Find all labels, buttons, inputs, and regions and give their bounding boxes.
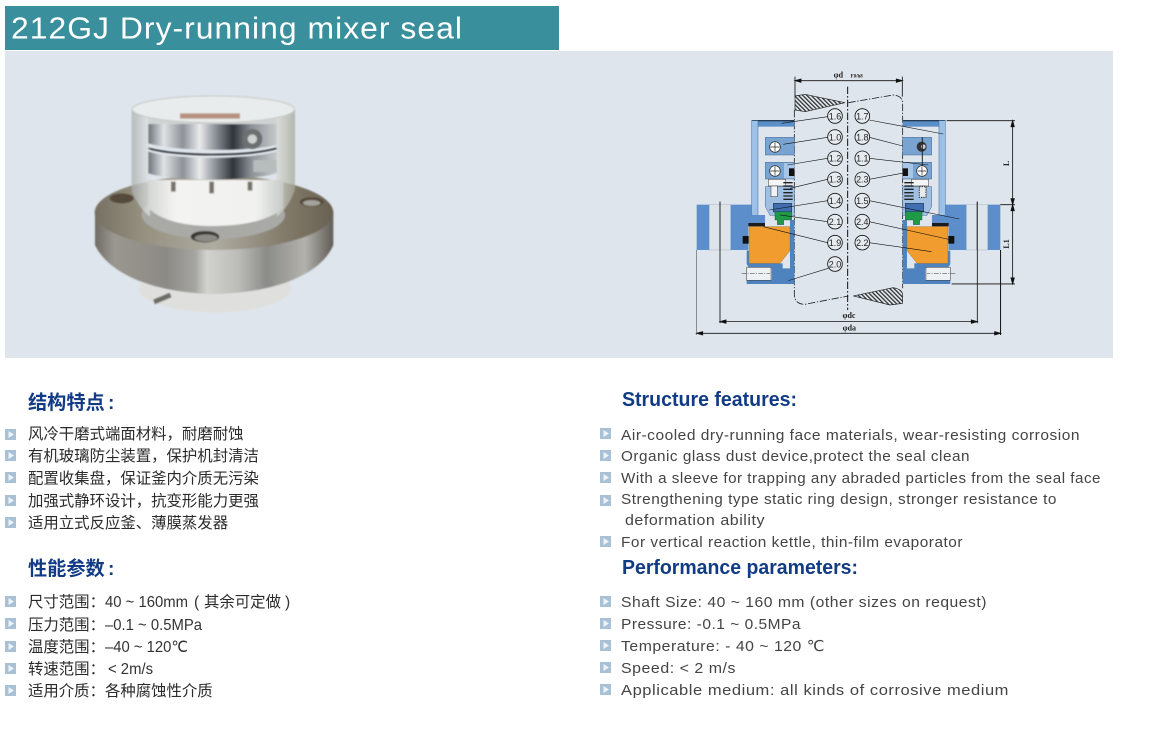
left adjusting screws <box>770 142 780 176</box>
part number balloons, left column <box>828 109 842 271</box>
list: Performance parameters: Speed: < 2 m/s <box>621 660 736 677</box>
list: Chinese structure features: 适用立式反应釜、薄膜蒸发器 <box>28 513 228 532</box>
right half of seal section <box>903 120 1000 335</box>
list: Performance parameters: Shaft Size: 40 ~ 160 mm (other sizes on request) <box>621 594 987 611</box>
list: Structure features: For vertical reaction kettle, thin-film evaporator <box>621 534 963 551</box>
list: Performance parameters: Temperature: - 40 ~ 120 ℃ <box>621 638 825 655</box>
dimension lines <box>697 77 1015 335</box>
list: Chinese performance parameters: 其余可定做 <box>204 592 281 611</box>
part number balloons, left column: 2.1 <box>829 217 841 227</box>
heading: Performance parameters: Performance parameters: <box>622 557 858 579</box>
list: Chinese performance parameters: ) <box>285 594 290 611</box>
title text: 212GJ Dry-running mixer seal <box>11 10 463 46</box>
list: Chinese structure features: 风冷干磨式端面材料，耐磨耐蚀 <box>28 425 243 443</box>
list: Chinese performance parameters: 转速范围： <box>28 660 105 678</box>
list: Chinese structure features: 配置收集盘，保证釜内介质无污染 <box>28 468 259 488</box>
part number balloons, left column: 1.0 <box>829 132 841 142</box>
part number balloons, right column: 2.3 <box>856 175 869 185</box>
list: Chinese structure features: 加强式静环设计，抗变形能力更强 <box>28 492 259 510</box>
part number balloons, left column: 1.3 <box>829 175 841 185</box>
list: Structure features: Strengthening type static ring design, stronger resistance to <box>621 491 1057 508</box>
dimension labels: L1 <box>1002 239 1011 249</box>
part number balloons, right column: 2.2 <box>856 238 869 248</box>
part number balloons, right column: 1.5 <box>856 196 869 206</box>
list: Structure features: Organic glass dust device,protect the seal clean <box>621 448 970 465</box>
cross-section technical diagram <box>697 70 1015 335</box>
dimension labels <box>834 70 1011 333</box>
part number balloons, right column: 2.4 <box>856 217 869 227</box>
product photo: dry-running mixer seal <box>95 96 333 312</box>
part number balloons, left column: 1.6 <box>829 111 841 121</box>
heading: Chinese performance parameters: 性能参数 <box>28 557 105 580</box>
part number balloons, left column: 1.9 <box>829 238 841 248</box>
dimension labels: φd <box>834 70 844 79</box>
list: Performance parameters <box>600 594 1009 699</box>
list: Structure features <box>600 427 1101 551</box>
list: Performance parameters: Pressure: -0.1 ~ 0.5MPa <box>621 616 801 633</box>
list: Chinese performance parameters <box>5 592 290 700</box>
list: Chinese performance parameters: < 2m/s <box>108 661 153 678</box>
dimension labels: φdc <box>842 311 856 320</box>
dimension labels: L <box>1002 161 1011 166</box>
part number balloons, right column: 1.8 <box>856 132 869 142</box>
part number balloons, left column: 1.2 <box>829 154 841 164</box>
list: Chinese performance parameters: 温度范围： <box>28 638 105 656</box>
part number balloons, right column <box>855 109 870 250</box>
heading: Chinese structure features: 结构特点 <box>28 392 105 414</box>
list: Chinese performance parameters: 适用介质：各种腐蚀性介质 <box>28 682 213 700</box>
left half of seal section <box>697 120 794 335</box>
title banner <box>5 6 559 50</box>
leader lines <box>763 117 959 281</box>
list: Chinese performance parameters: 尺寸范围： <box>28 593 105 611</box>
list: Chinese structure features <box>5 425 259 532</box>
shaft outline and hatching <box>794 87 903 310</box>
list: Chinese structure features: 有机玻璃防尘装置，保护机封清洁 <box>28 447 259 465</box>
panel: product image and diagram background <box>5 51 1113 358</box>
list: Chinese performance parameters: ( <box>194 594 200 611</box>
dimension labels: F8/h8 <box>851 75 863 80</box>
part number balloons, left column: 1.4 <box>829 196 841 206</box>
dimension labels: φda <box>843 324 856 333</box>
list: Performance parameters: Applicable medium: all kinds of corrosive medium <box>621 682 1009 699</box>
list: Chinese performance parameters: 压力范围： <box>28 616 105 634</box>
heading: Chinese performance parameters: : <box>108 559 114 580</box>
list: Chinese performance parameters: –40 ~ 120℃ <box>105 639 188 656</box>
list: Structure features: Air-cooled dry-running face materials, wear-resisting corrosion <box>621 427 1080 444</box>
list: Structure features: deformation ability <box>625 512 765 529</box>
part number balloons, right column: 1.1 <box>856 154 869 164</box>
part number balloons, left column: 2.0 <box>829 259 841 269</box>
list: Chinese performance parameters: 40 ~ 160mm <box>105 594 188 611</box>
list: Structure features: With a sleeve for trapping any abraded particles from the seal face <box>621 470 1101 487</box>
part number balloons, right column: 1.7 <box>856 111 869 121</box>
heading: Chinese structure features: : <box>108 393 114 414</box>
heading: Structure features: Structure features: <box>622 389 797 411</box>
list: Chinese performance parameters: –0.1 ~ 0.5MPa <box>105 617 202 634</box>
